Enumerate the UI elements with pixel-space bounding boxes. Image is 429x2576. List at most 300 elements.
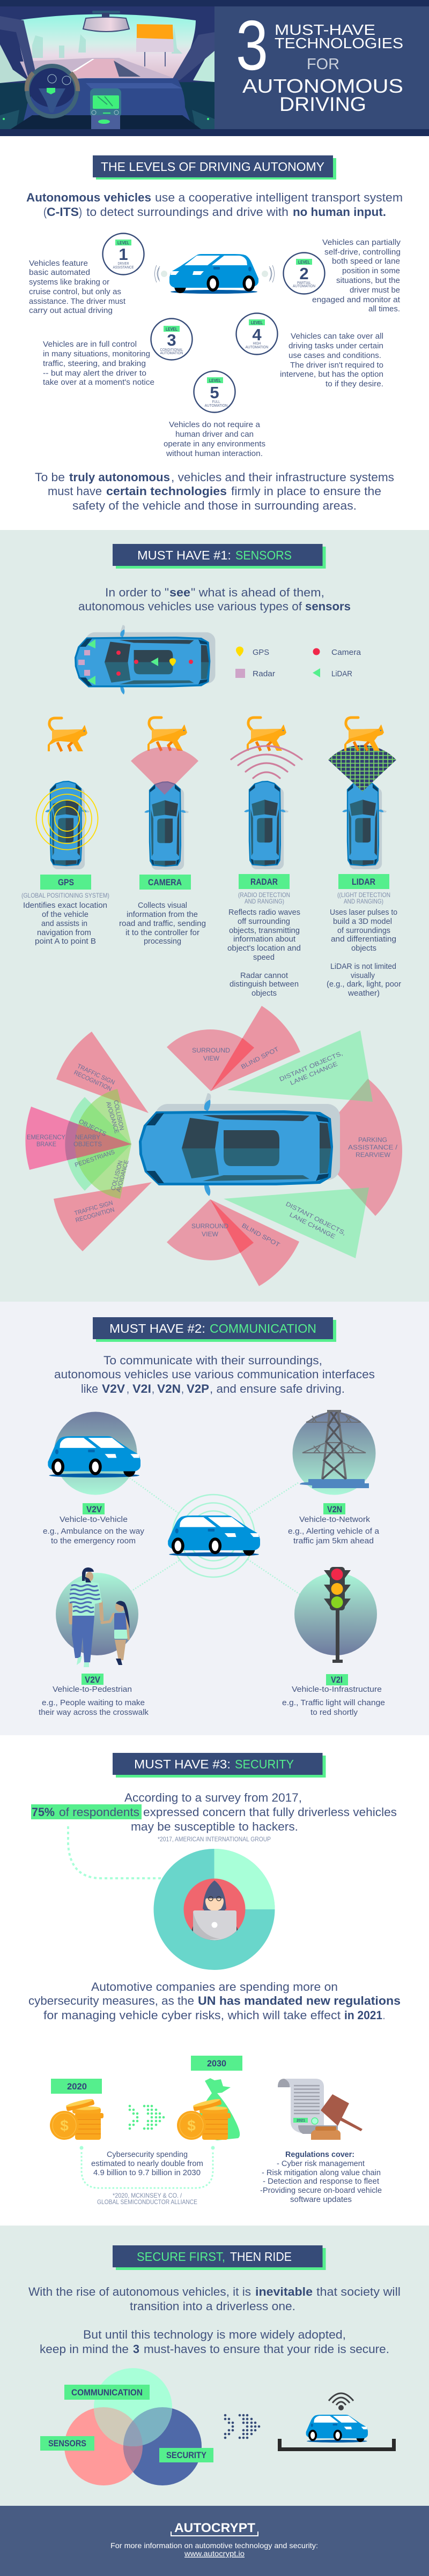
nearby objects fan	[75, 1124, 131, 1158]
level 3 description: take over at a moment's notice	[43, 378, 154, 387]
paragraph: un regulations: in 2021	[344, 2008, 382, 2022]
spending text: Cybersecurity spending	[107, 2150, 188, 2159]
level 5 description: Vehicles do not require a	[169, 420, 261, 429]
hacker	[191, 1880, 238, 1940]
paragraph: sensors intro: sensors	[305, 600, 351, 613]
level 2 description: both speed or lane	[332, 257, 400, 266]
level 2 description: self-drive, controlling	[324, 248, 401, 257]
paragraph: un regulations: UN has mandated new regulations	[198, 1994, 401, 2007]
lidar column: objects	[351, 944, 376, 953]
camera column: road and traffic, sending	[119, 919, 206, 928]
level 3 badge	[151, 318, 192, 360]
level 1 description: systems like braking or	[29, 278, 109, 287]
v2i illustration: traffic light	[294, 1567, 377, 1663]
source note: 2020	[97, 2192, 197, 2206]
fan labels: SURROUND	[192, 1048, 230, 1054]
gps column: navigation from	[37, 928, 91, 937]
radar column: distinguish between	[230, 980, 299, 989]
radar column: RADAR	[250, 877, 278, 887]
closing paragraph: keep in mind the	[40, 2342, 129, 2356]
level 2 description: engaged and monitor at	[312, 295, 401, 304]
level 4 badge: HIGH	[253, 341, 261, 346]
radar column	[227, 874, 301, 998]
v2v label and text: to the emergency room	[51, 1536, 136, 1545]
paragraph: survey: of respondents	[59, 1805, 139, 1819]
rear-view mirror	[83, 11, 129, 32]
level 5 badge: 5	[210, 383, 219, 402]
radar column: AND RANGING)	[245, 898, 284, 905]
intro paragraph	[26, 191, 403, 219]
v2p label and text: their way across the crosswalk	[39, 1708, 149, 1717]
title text: DRIVING	[279, 93, 366, 115]
panel: must have 2 communication background	[0, 1302, 429, 1735]
radar markers	[78, 650, 90, 676]
money bag and coins 2030: $	[187, 2117, 196, 2134]
level 5 badge	[194, 371, 235, 413]
sensor legend: Camera	[331, 648, 361, 657]
heading: levels of driving autonomy	[93, 155, 336, 180]
sensor coverage diagram	[25, 1006, 402, 1286]
level 4 badge: LEVEL	[251, 320, 263, 325]
heading: secure first then ride	[113, 2245, 326, 2270]
lidar column: build a 3D model	[333, 917, 392, 926]
level 1 badge	[103, 234, 144, 274]
paragraph: truly autonomous: must have	[48, 484, 102, 498]
source note: 2020: GLOBAL SEMICONDUCTOR ALLIANCE	[97, 2198, 197, 2206]
level 1 description	[29, 259, 126, 315]
v2n label and text: traffic jam 5km ahead	[293, 1536, 374, 1545]
paragraph: survey: may be susceptible to hackers.	[131, 1820, 298, 1833]
objects and pedestrians fan	[65, 1097, 131, 1191]
v2p label and text	[39, 1674, 149, 1717]
level 3 badge: LEVEL	[166, 327, 177, 332]
lidar column: LiDAR is not limited	[330, 962, 396, 971]
fan labels: LANE CHANGE	[289, 1061, 339, 1087]
distant objects fans	[224, 1031, 373, 1258]
level 1 badge: LEVEL	[117, 241, 129, 245]
footer panel	[0, 2506, 429, 2576]
gps column: GPS	[58, 877, 74, 887]
paragraph: truly autonomous: safety of the vehicle and those in surrounding areas.	[72, 499, 357, 512]
paragraph: truly autonomous: To be	[35, 471, 65, 484]
v2n label and text: e.g., Alerting vehicle of a	[288, 1527, 380, 1536]
paragraph: survey: According to a survey from 2017,	[124, 1791, 302, 1804]
emergency brake fan	[25, 1107, 131, 1170]
fan labels: AVOIDANCE	[105, 1101, 120, 1134]
v2v label and text: V2V	[86, 1504, 102, 1514]
gps column	[21, 875, 109, 946]
level 2 description: situations, but the	[336, 276, 400, 285]
arrow: leads to secure ride	[224, 2414, 260, 2439]
pie chart with hacker: 75 percent	[153, 1849, 275, 1970]
lidar illustration: car, grid fan, cat	[328, 718, 396, 869]
big car	[139, 1093, 340, 1196]
girl	[102, 1601, 130, 1665]
v2n label and text: Vehicle-to-Network	[299, 1515, 371, 1524]
fan labels: DISTANT OBJECTS,	[278, 1050, 344, 1083]
level 1 badge: ASSISTANCE	[113, 265, 134, 270]
paragraph: communication intro: ,	[181, 1382, 184, 1395]
connection lines between the car and the four interfaces	[130, 1478, 300, 1594]
intro paragraph: (	[43, 205, 47, 219]
bottom surround view and blind spot fans	[167, 1199, 299, 1286]
heading: secure first then ride: THEN RIDE	[230, 2250, 292, 2264]
lidar column: (e.g., dark, light, poor	[327, 980, 401, 989]
paragraph: truly autonomous	[35, 471, 394, 512]
heading: secure first then ride: SECURE FIRST,	[137, 2250, 225, 2264]
billboard	[136, 24, 174, 66]
spending text	[91, 2150, 203, 2177]
sensor legend	[235, 646, 361, 678]
level 1 badge: 1	[119, 245, 128, 264]
radar column: off surrounding	[238, 917, 290, 926]
level 2 badge: PARTIAL	[297, 280, 311, 285]
heading: must have 3 security	[113, 1753, 326, 1778]
paragraph: un regulations: .	[383, 2008, 385, 2022]
v2p label and text: e.g., People waiting to make	[42, 1698, 145, 1707]
radar column: Radar cannot	[240, 971, 289, 980]
paragraph: survey: 75%	[32, 1805, 55, 1819]
paragraph: communication intro: To communicate with their surroundings,	[103, 1354, 322, 1367]
v2i label and text: e.g., Traffic light will change	[282, 1698, 385, 1707]
paragraph: communication intro: V2I	[132, 1382, 151, 1395]
fan labels: TRAFFIC SIGN	[76, 1063, 116, 1086]
paragraph: truly autonomous: , vehicles and their infrastructure systems	[171, 471, 394, 484]
paragraph: communication intro: ,	[152, 1382, 154, 1395]
v2v label and text	[43, 1503, 145, 1545]
level 1 badge: DRIVER	[118, 261, 129, 266]
source note: 2017: *2017, AMERICAN INTERNATIONAL GROUP	[158, 1835, 271, 1843]
closing paragraph: must-haves to ensure that your ride is secure.	[144, 2342, 389, 2356]
secure car with wifi signal	[280, 2393, 394, 2449]
heading: must have 2 communication: MUST HAVE #2:	[109, 1321, 205, 1335]
heading: must have 3 security: MUST HAVE #3:	[134, 1757, 231, 1771]
communication tag: COMMUNICATION	[71, 2387, 143, 2398]
heading: must have 2 communication	[93, 1317, 336, 1342]
fan labels: COLLISION	[112, 1100, 125, 1131]
heading: must have 2 communication: COMMUNICATION	[210, 1321, 316, 1335]
level 1 description: carry out actual driving	[29, 306, 113, 315]
intro paragraph: no human input.	[293, 205, 386, 219]
paragraph: truly autonomous: certain technologies	[106, 484, 227, 498]
communication tag	[64, 2385, 150, 2400]
security tag: SECURITY	[166, 2450, 207, 2460]
title text: MUST-HAVE	[275, 21, 375, 38]
camera column: it to the controller for	[125, 928, 199, 937]
camera column: processing	[144, 937, 181, 946]
fan labels: PARKING	[358, 1137, 387, 1144]
level 5 badge: LEVEL	[209, 378, 221, 383]
gps column: point A to point B	[35, 937, 96, 946]
central connected car with signal rings	[168, 1495, 260, 1577]
camera column: Collects visual	[138, 901, 187, 910]
level 4 badge: 4	[252, 325, 262, 344]
intro paragraph: C-ITS	[47, 205, 79, 219]
fan labels: TRAFFIC SIGN	[74, 1200, 114, 1217]
lidar markers	[87, 639, 158, 685]
paragraph: sensors intro: In order to "	[105, 586, 169, 599]
v2p illustration: parent and child	[56, 1567, 138, 1667]
dashed connector to pie	[68, 1826, 161, 1878]
fan labels: LANE CHANGE	[289, 1212, 336, 1241]
camera column: information from the	[127, 910, 198, 919]
radar column: objects, transmitting	[229, 926, 300, 935]
level 4 description: use cases and conditions.	[289, 351, 381, 360]
gps column: of the vehicle	[42, 910, 88, 919]
radar column: speed	[253, 953, 275, 962]
steering wheel	[27, 64, 78, 116]
level 3 badge: 3	[167, 331, 176, 349]
closing paragraph: that society will	[316, 2285, 401, 2298]
spending text: 4.9 billion to 9.7 billion in 2030	[93, 2168, 201, 2177]
sensor legend: LiDAR	[331, 669, 352, 678]
venn diagram	[40, 2368, 213, 2485]
heading: must have 1 sensors: MUST HAVE #1:	[137, 548, 231, 562]
paragraph: truly autonomous: firmly in place to ensure the	[231, 484, 381, 498]
v2i label and text	[282, 1674, 385, 1717]
footer text: www.autocrypt.io	[184, 2549, 245, 2558]
v2p label and text: Vehicle-to-Pedestrian	[53, 1685, 132, 1694]
paragraph: survey: expressed concern that fully driverless vehicles	[143, 1805, 397, 1819]
year tag 2030: 2030	[207, 2058, 226, 2069]
level 1 description: Vehicles feature	[29, 259, 88, 268]
paragraph: communication intro: V2P	[187, 1382, 209, 1395]
v2v illustration	[48, 1412, 140, 1495]
level 2 description: position in some	[342, 266, 400, 275]
camera markers	[116, 651, 193, 676]
level 5 badge: AUTOMATION	[205, 403, 227, 408]
level 2 badge	[283, 253, 325, 294]
fan labels: OBJECTS	[73, 1141, 102, 1148]
v2i label and text: Vehicle-to-Infrastructure	[292, 1685, 382, 1694]
level 3 description: in many situations, monitoring	[43, 349, 150, 359]
paragraph: communication intro: V2N	[157, 1382, 181, 1395]
illustration: car interior view	[0, 6, 214, 129]
regulations list: - Detection and response to fleet	[263, 2177, 380, 2186]
central car with sensors	[154, 254, 275, 294]
level 5 description: operate in any environments	[164, 439, 265, 449]
level 4 description: Vehicles can take over all	[291, 332, 383, 341]
fan labels: BRAKE	[36, 1141, 56, 1148]
paragraph: communication intro: , and ensure safe driving.	[210, 1382, 345, 1395]
center console	[90, 88, 121, 129]
level 4 description: The driver isn't required to	[290, 361, 383, 370]
year tag 2030	[191, 2056, 242, 2071]
regulations list: -Providing secure on-board vehicle	[260, 2186, 382, 2195]
fan labels: ASSISTANCE /	[348, 1145, 398, 1151]
closing paragraph: inevitable	[255, 2285, 313, 2298]
title text	[236, 6, 403, 115]
title text: AUTONOMOUS	[242, 75, 403, 97]
sensor legend: GPS	[253, 648, 269, 657]
security tag	[159, 2448, 213, 2462]
radar column: object's location and	[227, 944, 301, 953]
fan labels: BLIND SPOT	[240, 1046, 280, 1071]
document and gavel	[278, 2079, 363, 2140]
level 4 badge: AUTOMATION	[246, 345, 268, 349]
level 5 description: without human interaction.	[166, 449, 263, 458]
lidar column: AND RANGING)	[344, 898, 383, 905]
car top view with sensor markers	[75, 625, 216, 695]
closing paragraph: With the rise of autonomous vehicles, it is	[28, 2285, 251, 2298]
paragraph: communication intro: like	[81, 1382, 98, 1395]
level 2 badge: LEVEL	[298, 260, 310, 265]
traffic sign fans	[54, 1032, 152, 1251]
intro paragraph: use a cooperative intelligent transport system	[155, 191, 403, 204]
heading: must have 1 sensors: SENSORS	[235, 548, 292, 562]
lidar column: Uses laser pulses to	[330, 908, 397, 917]
closing paragraph: 3	[133, 2342, 139, 2356]
coins 2020: $	[60, 2117, 69, 2134]
gps marker	[169, 658, 176, 666]
sensors tag	[40, 2436, 94, 2451]
paragraph: communication intro: V2V	[102, 1382, 125, 1395]
closing paragraph: But until this technology is more widely adopted,	[83, 2328, 346, 2341]
v2n label and text	[288, 1503, 380, 1545]
v2p label and text: V2V	[85, 1675, 101, 1685]
fan labels: DISTANT OBJECTS,	[285, 1201, 347, 1237]
gavel	[321, 2094, 363, 2131]
closing paragraph: transition into a driverless one.	[130, 2299, 295, 2313]
sensors tag: SENSORS	[48, 2438, 86, 2448]
paragraph: un regulations	[28, 1980, 401, 2022]
camera column: CAMERA	[148, 877, 182, 887]
fan labels: NEARBY	[75, 1134, 100, 1141]
panel: must have 1 sensors background	[0, 530, 429, 1302]
heading: levels of driving autonomy: THE LEVELS OF DRIVING AUTONOMY	[101, 160, 324, 174]
level 2 badge: AUTOMATION	[293, 283, 315, 288]
footer text	[110, 2541, 318, 2558]
level 3 description: traffic, steering, and braking	[43, 359, 146, 368]
panel: secure first background	[0, 2226, 429, 2506]
level 1 description: cruise control, but only as	[29, 287, 121, 296]
gps column: Identifies exact location	[23, 901, 107, 910]
paragraph: sensors intro	[78, 586, 351, 613]
title panel	[214, 6, 429, 129]
top surround view and blind spot fans	[167, 1006, 300, 1091]
gps illustration: cat, car, rings	[36, 718, 98, 869]
paragraph: sensors intro: see	[169, 586, 190, 599]
collision avoidance fan	[75, 1089, 131, 1199]
level 2 description: driver must be	[350, 286, 400, 295]
level 5 description: human driver and can	[175, 430, 254, 439]
paragraph: un regulations: for managing vehicle cyber risks, which will take effect	[43, 2008, 341, 2022]
v2v label and text: Vehicle-to-Vehicle	[60, 1515, 128, 1524]
level 5 badge: FULL	[212, 399, 220, 404]
source note: 2020: *2020, MCKINSEY & CO. /	[113, 2192, 182, 2199]
fan labels: RECOGNITION	[75, 1207, 115, 1224]
lidar column: visually	[351, 971, 375, 980]
lidar column: ((LIGHT DETECTION	[337, 891, 390, 899]
heading: must have 3 security: SECURITY	[235, 1757, 294, 1771]
radar illustration: cat, car, arcs	[231, 718, 302, 869]
title text: 3	[236, 6, 268, 85]
intro paragraph: )	[79, 205, 82, 219]
level 5 description	[164, 420, 265, 458]
level 2 badge: 2	[299, 264, 309, 283]
title text: FOR	[307, 56, 339, 73]
fan labels: EMERGENCY	[27, 1134, 65, 1141]
fan labels: COLLISION	[110, 1160, 124, 1191]
year tag 2020	[51, 2079, 102, 2094]
v2i label and text: V2I	[331, 1675, 343, 1685]
lidar column: and differentiating	[331, 935, 396, 944]
radar column: (RADIO DETECTION	[238, 891, 290, 899]
fan labels: OBJECTS	[78, 1118, 107, 1138]
coins 2020	[50, 2097, 103, 2140]
level 4 description: to if they desire.	[326, 379, 383, 389]
header band	[0, 0, 429, 136]
fan labels: VIEW	[202, 1231, 218, 1238]
level 1 description: assistance. The driver must	[29, 297, 126, 306]
level 3 description: Vehicles are in full control	[43, 340, 137, 349]
level 3 badge: AUTOMATION	[160, 350, 183, 355]
paragraph: un regulations: cybersecurity measures, as the	[28, 1994, 194, 2007]
level 2 description	[312, 238, 401, 313]
lidar column: weather)	[347, 989, 380, 998]
regulations list: software updates	[290, 2195, 352, 2204]
level 4 description: driving tasks under certain	[289, 341, 383, 350]
radar column: Reflects radio waves	[228, 908, 300, 917]
fan labels: SURROUND	[191, 1223, 228, 1230]
level 2 description: all times.	[368, 304, 400, 313]
year tag 2020: 2020	[67, 2081, 87, 2092]
level 4 description	[280, 332, 383, 389]
man	[69, 1567, 102, 1667]
fan labels: BLIND SPOT	[241, 1222, 280, 1249]
fan labels: REARVIEW	[356, 1152, 390, 1159]
lidar column: of surroundings	[337, 926, 390, 935]
level 4 description: intervene, but has the option	[280, 370, 383, 379]
paragraph: sensors intro: " what is ahead of them,	[191, 586, 324, 599]
paragraph: survey	[31, 1791, 397, 1833]
radar column: information about	[233, 935, 296, 944]
paragraph: truly autonomous: truly autonomous	[69, 471, 170, 484]
regulations list: - Risk mitigation along value chain	[262, 2168, 381, 2177]
fan labels	[27, 1046, 398, 1249]
paragraph: sensors intro: autonomous vehicles use various types of	[78, 600, 302, 613]
spending text: estimated to nearly double from	[91, 2159, 203, 2168]
level 1 description: basic automated	[29, 268, 90, 277]
level 3 description: -- but may alert the driver to	[43, 369, 146, 378]
v2n illustration: transmission tower	[293, 1410, 375, 1495]
intro paragraph: to detect surroundings and drive with	[86, 205, 289, 219]
regulations list: Regulations cover:	[285, 2150, 354, 2159]
v2i label and text: to red shortly	[310, 1708, 358, 1717]
title text: TECHNOLOGIES	[275, 35, 403, 51]
parking assistance fan	[311, 1079, 402, 1216]
gps column: (GLOBAL POSITIONING SYSTEM)	[21, 892, 109, 899]
v2v label and text: e.g., Ambulance on the way	[43, 1527, 145, 1536]
heading: must have 1 sensors	[113, 544, 326, 569]
radar column: objects	[252, 989, 277, 998]
gps column: and assists in	[41, 919, 87, 928]
document and gavel: 2021	[297, 2119, 305, 2123]
fan labels: RECOGNITION	[73, 1070, 113, 1093]
intro paragraph: Autonomous vehicles	[26, 191, 151, 204]
paragraph: un regulations: Automotive companies are spending more on	[91, 1980, 338, 1993]
level 3 badge: CONDITIONAL	[160, 347, 183, 352]
lidar column	[327, 874, 401, 998]
fan labels: PEDESTRIANS	[74, 1149, 116, 1169]
lidar column: LIDAR	[352, 877, 375, 887]
closing paragraph	[28, 2285, 401, 2356]
paragraph: communication intro: autonomous vehicles use various communication interfaces	[54, 1368, 375, 1381]
paragraph: communication intro: ,	[127, 1382, 129, 1395]
money bag and coins 2030	[177, 2078, 240, 2140]
camera illustration: cat, car, fan	[131, 718, 198, 870]
level 2 description: Vehicles can partially	[322, 238, 401, 247]
